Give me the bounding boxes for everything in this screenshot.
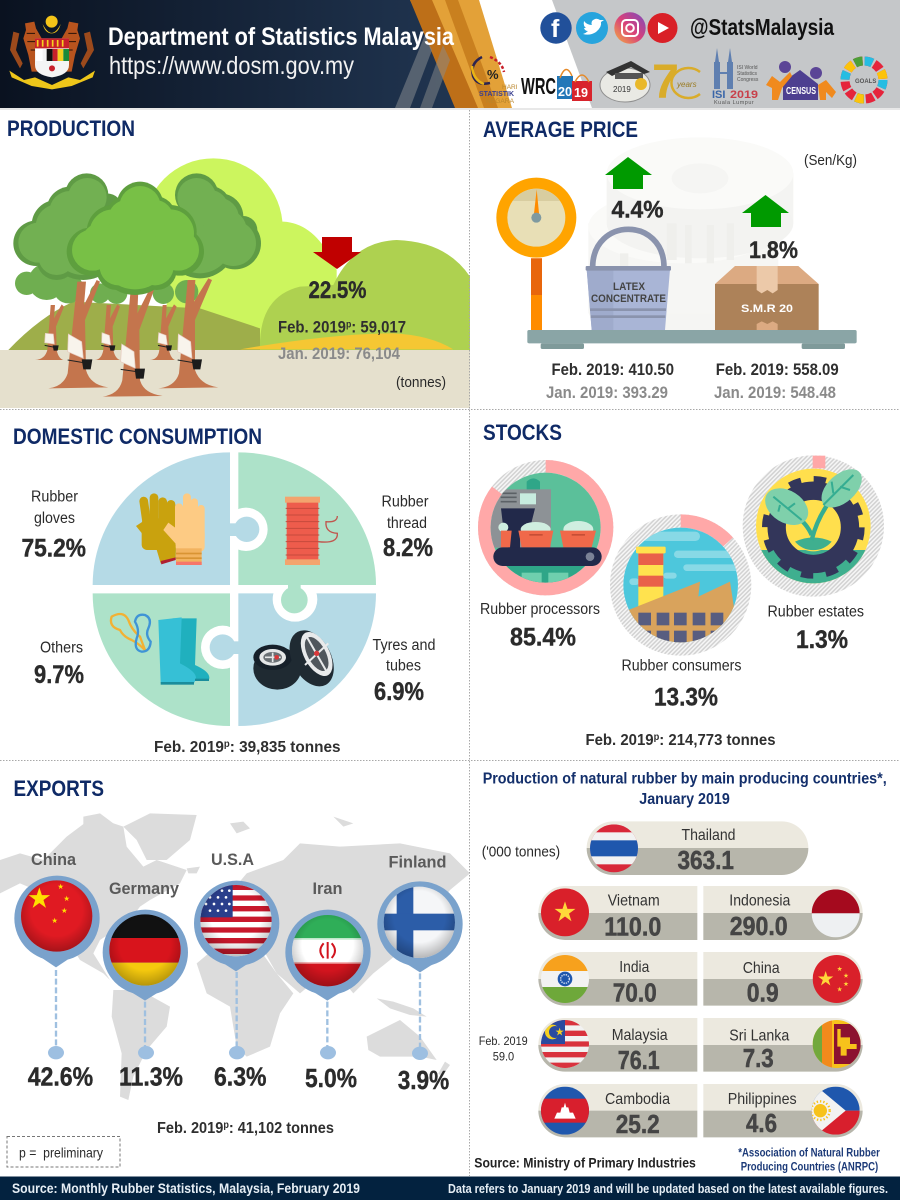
legend: preliminary: p = preliminary (19, 1144, 103, 1160)
label: rubber thread (382, 494, 428, 532)
SMR February: Feb. 2019: 558.09 (716, 360, 839, 379)
heading: stocks: STOCKS (483, 420, 562, 445)
logo: ISI 2019 Kuala Lumpur: Kuala Lumpur (714, 100, 754, 106)
logo: ISI 2019 Kuala Lumpur: Statistics (737, 71, 758, 77)
latex January: Jan. 2019: 393.29 (546, 383, 668, 402)
ring: rubber processors (484, 466, 620, 589)
panel: stocks (480, 420, 877, 749)
logo: 70 years: 7 (652, 56, 679, 109)
Cambodia name and value (605, 1091, 670, 1139)
logo: WRC 2019: WRC (521, 73, 556, 99)
logo: ISI 2019 Kuala Lumpur: ISI (712, 89, 725, 101)
logo: WRC 2019 (521, 69, 592, 101)
header website: https://www.dosm.gov.my (109, 52, 354, 80)
Malaysia February note (479, 1034, 528, 1064)
Malaysia name and value (612, 1027, 668, 1075)
Philippines name and value (728, 1091, 797, 1138)
logo: Hesiya 2019: 2019 (613, 85, 631, 94)
Cambodia name and value: Cambodia (605, 1091, 670, 1108)
pill: Sri Lanka (703, 1018, 863, 1072)
bucket label (591, 281, 666, 305)
Sri Lanka name and value: Sri Lanka (729, 1028, 789, 1044)
pill: Cambodia (538, 1084, 697, 1137)
icon: Malaysia coat of arms (9, 16, 95, 89)
icon: instagram (614, 12, 646, 44)
icon: gloves (136, 493, 205, 565)
box label: S.M.R 20 (741, 303, 793, 315)
logo: 70 years (652, 56, 700, 109)
production unit: (tonnes) (396, 374, 446, 391)
logo: Census Malaysia (766, 61, 836, 100)
Indonesia name and value: Indonesia (729, 892, 790, 910)
label: rubber estates: Rubber estates (768, 604, 864, 620)
pill: Malaysia (538, 1018, 697, 1072)
arrow: latex up (605, 157, 652, 189)
India name and value: India (619, 959, 649, 976)
legend: preliminary (7, 1136, 120, 1167)
pill: India (538, 952, 697, 1006)
heading: exports: EXPORTS (14, 776, 104, 801)
SMR change: 1.8% (749, 237, 798, 264)
China name and value (743, 960, 780, 1008)
Vietnam name and value: Vietnam (608, 892, 660, 910)
header banner (0, 0, 900, 110)
value: rubber thread: 8.2% (383, 534, 433, 562)
stocks total: p (654, 732, 659, 743)
world map with country pins (0, 813, 470, 1100)
value: rubber gloves: 75.2% (22, 534, 86, 562)
dashed connectors and dots (48, 970, 428, 1060)
panel: production (0, 116, 470, 408)
Indonesia name and value (729, 892, 790, 941)
label: Germany: Germany (109, 879, 180, 898)
label: rubber gloves: Rubber (31, 488, 78, 506)
production February: : 59,017 (351, 318, 406, 336)
consumption total: Feb. 2019 (154, 739, 227, 756)
heading: production: PRODUCTION (7, 116, 135, 141)
logo: Hari Statistik Negara: NEGARA (486, 98, 515, 105)
icon: elastic bands and boots (111, 614, 209, 685)
production February: Feb. 2019 (278, 318, 356, 336)
stock rings and illustrations (484, 456, 877, 649)
header title: Department of Statistics Malaysia (108, 23, 455, 51)
Malaysia name and value: 76.1 (618, 1045, 660, 1075)
Sri Lanka name and value (729, 1028, 789, 1073)
exports total: Feb. 2019 (157, 1120, 230, 1137)
India name and value (613, 959, 657, 1008)
footer bar (0, 1176, 900, 1200)
icon: twitter (576, 12, 608, 44)
logo: ISI 2019 Kuala Lumpur: ISI World (737, 65, 758, 71)
pin: Germany (103, 910, 188, 1001)
ring: rubber estates (749, 456, 877, 590)
production February: p (346, 320, 351, 330)
Thailand name and value: 363.1 (678, 845, 734, 875)
panel: natural rubber production by country (474, 770, 887, 1174)
label: rubber gloves: gloves (34, 510, 75, 527)
label: Iran: Iran (312, 879, 342, 898)
label: tyres and tubes (372, 637, 436, 674)
pin: U.S.A (194, 881, 279, 971)
stocks total: Feb. 2019 (586, 732, 658, 749)
icon: thread spool (285, 497, 337, 565)
country pills with flags (538, 821, 863, 1137)
China name and value: 0.9 (747, 978, 779, 1008)
logo: ISI 2019 Kuala Lumpur: 2019 (730, 89, 758, 101)
puzzle pie chart with icons (93, 452, 376, 726)
value: rubber consumers: 13.3% (654, 684, 718, 712)
pin: Finland (377, 881, 463, 972)
logo: Hari Statistik Negara: STATISTIK (479, 91, 514, 98)
Thailand name and value: Thailand (682, 827, 736, 844)
stocks total: : 214,773 tonnes (659, 732, 776, 749)
heading: producing countries (483, 770, 887, 808)
icon: tyres (253, 623, 343, 694)
label: others: Others (40, 640, 83, 656)
panel: average price (483, 117, 857, 402)
unit: thousand tonnes: ('000 tonnes) (482, 844, 560, 860)
pill: Philippines (703, 1084, 863, 1137)
logo: ISI 2019 Kuala Lumpur: Congress (737, 77, 759, 83)
Vietnam name and value: 110.0 (604, 912, 661, 942)
latex change: 4.4% (612, 196, 664, 224)
ring: rubber consumers (617, 521, 745, 649)
value: China: 42.6% (28, 1062, 93, 1092)
label: rubber gloves (31, 488, 78, 527)
Malaysia February note: Feb. 2019 (479, 1034, 528, 1048)
pill: Vietnam (538, 886, 697, 940)
logo: ISI 2019 Kuala Lumpur (712, 48, 759, 106)
heading: domestic consumption: DOMESTIC CONSUMPTION (13, 424, 262, 449)
China name and value: China (743, 960, 780, 977)
Philippines name and value: Philippines (728, 1091, 797, 1108)
source: ministry: Source: Ministry of Primary Industries (474, 1154, 696, 1170)
consumption total: : 39,835 tonnes (230, 739, 341, 756)
world map (0, 813, 470, 1100)
Philippines name and value: 4.6 (746, 1108, 777, 1138)
value: Finland: 3.9% (398, 1065, 449, 1095)
pin: Iran (285, 910, 371, 1001)
label: tyres and tubes: Tyres and (372, 637, 436, 654)
pill: Indonesia (703, 886, 863, 940)
pill: China (703, 952, 863, 1006)
latex February: Feb. 2019: 410.50 (552, 360, 674, 379)
footnote: ANRPC (738, 1146, 880, 1174)
logo: Hari Statistik Negara (472, 57, 518, 105)
arrow: SMR up (742, 195, 789, 227)
pin: China (14, 876, 100, 967)
production illustration: hills and rubber trees (0, 158, 470, 408)
arrow: production down (313, 237, 361, 269)
label: U.S.A: U.S.A (211, 850, 254, 869)
logo: Hari Statistik Negara: % (487, 67, 499, 82)
Sri Lanka name and value: 7.3 (743, 1043, 774, 1073)
value: rubber processors: 85.4% (510, 624, 576, 652)
average price illustration: scale, latex bucket and SMR box (496, 137, 857, 349)
bucket label: CONCENTRATE (591, 293, 666, 305)
panel: exports (0, 776, 470, 1167)
consumption total: p (224, 739, 230, 750)
icon: facebook (540, 12, 572, 44)
Malaysia name and value: Malaysia (612, 1027, 668, 1044)
label: rubber thread: thread (387, 515, 427, 532)
bucket label: LATEX (613, 281, 646, 293)
label: rubber thread: Rubber (382, 494, 428, 510)
pill: Thailand (587, 821, 808, 875)
icon: facebook: f (551, 15, 560, 43)
value: rubber estates: 1.3% (796, 626, 848, 654)
social handle: @StatsMalaysia (690, 14, 834, 40)
Vietnam name and value (604, 892, 661, 942)
logo: WRC 2019: 19 (574, 85, 588, 100)
value: Iran: 5.0% (305, 1063, 357, 1093)
value: tyres and tubes: 6.9% (374, 678, 424, 706)
Indonesia name and value: 290.0 (730, 911, 788, 941)
logo: Hesiya 2019 (600, 61, 650, 102)
logo: Census Malaysia: CENSUS (786, 86, 816, 97)
footer source: Source: Monthly Rubber Statistics, Malaysia, February 2019 (12, 1180, 360, 1196)
label: rubber consumers: Rubber consumers (622, 658, 742, 674)
logo: 70 years: years (676, 80, 697, 89)
heading: producing countries: January 2019 (639, 791, 730, 808)
SMR January: Jan. 2019: 548.48 (714, 383, 836, 402)
unit: sen per kg: (Sen/Kg) (804, 152, 857, 169)
value: others: 9.7% (34, 661, 84, 689)
panel: domestic consumption (13, 424, 436, 756)
production change: 22.5% (308, 277, 366, 304)
icon: youtube (648, 13, 678, 43)
label: China: China (31, 850, 77, 869)
Cambodia name and value: 25.2 (616, 1109, 660, 1139)
Thailand name and value (678, 827, 736, 875)
label: Finland: Finland (388, 852, 446, 872)
logo: sustainable development goals wheel (845, 61, 883, 99)
Malaysia February note: 59.0 (493, 1050, 514, 1064)
label: tyres and tubes: tubes (386, 658, 421, 674)
exports total: p (223, 1120, 229, 1131)
label: rubber processors: Rubber processors (480, 601, 600, 618)
heading: average price: AVERAGE PRICE (483, 117, 638, 142)
logo: sustainable development goals wheel: GOALS (855, 79, 876, 85)
value: U.S.A: 6.3% (214, 1062, 266, 1092)
India name and value: 70.0 (613, 978, 657, 1008)
logo: Hari Statistik Negara: HARI (502, 84, 518, 91)
logo: WRC 2019: 20 (558, 84, 572, 99)
production January: Jan. 2019: 76,104 (278, 344, 400, 363)
exports total: : 41,102 tonnes (229, 1120, 334, 1137)
value: Germany: 11.3% (119, 1062, 183, 1092)
